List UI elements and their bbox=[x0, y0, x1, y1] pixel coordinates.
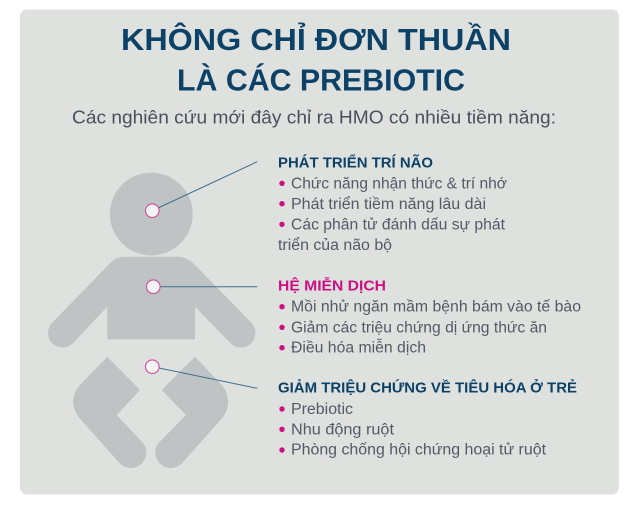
baby right leg bbox=[155, 357, 228, 468]
connector: digestion bbox=[159, 368, 257, 388]
title bbox=[121, 21, 511, 98]
marker: head bbox=[146, 204, 159, 218]
title: LÀ CÁC PREBIOTIC bbox=[177, 62, 465, 98]
heading: brain development: PHÁT TRIỂN TRÍ NÃO bbox=[278, 154, 433, 172]
bullets: brain development bbox=[278, 175, 507, 254]
section: brain development bbox=[278, 154, 507, 254]
bullets: brain development: Các phân tử đánh dấu sự phát bbox=[291, 216, 506, 233]
marker: chest bbox=[146, 280, 160, 294]
bullets: brain development: Phát triển tiềm năng lâu dài bbox=[291, 196, 486, 213]
section: immune system bbox=[278, 277, 581, 357]
bullets: immune system bbox=[279, 299, 581, 357]
bullets: digestive symptoms: Phòng chống hội chứng hoại tử ruột bbox=[291, 442, 547, 458]
bullets: brain development: Chức năng nhận thức & trí nhớ bbox=[291, 175, 507, 192]
bullets: digestive symptoms: Prebiotic bbox=[291, 401, 353, 418]
baby torso and arms bbox=[48, 257, 256, 348]
marker: belly bbox=[146, 360, 159, 374]
bullets: digestive symptoms: Nhu động ruột bbox=[291, 421, 395, 438]
heading: digestive symptoms: GIẢM TRIỆU CHỨNG VỀ TIÊU HÓA Ở TRẺ bbox=[278, 379, 577, 397]
bullets: immune system: Điều hóa miễn dịch bbox=[291, 340, 426, 357]
icon: baby silhouette bbox=[48, 173, 256, 468]
baby head bbox=[110, 173, 193, 255]
subtitle: Các nghiên cứu mới đây chỉ ra HMO có nhiều tiềm năng: bbox=[72, 106, 556, 127]
heading: immune system: HỆ MIỄN DỊCH bbox=[278, 277, 386, 295]
connector: brain bbox=[158, 162, 257, 208]
section: digestive symptoms bbox=[278, 379, 577, 458]
bullets: immune system: Mồi nhử ngăn mầm bệnh bám vào tế bào bbox=[291, 299, 581, 316]
bullets: digestive symptoms bbox=[279, 401, 547, 458]
baby left leg bbox=[73, 357, 146, 468]
connector: immune bbox=[160, 286, 257, 288]
bullets: immune system: Giảm các triệu chứng dị ứng thức ăn bbox=[291, 320, 547, 337]
bullets: brain development: triển của não bộ bbox=[278, 237, 392, 254]
title: KHÔNG CHỈ ĐƠN THUẦN bbox=[121, 21, 511, 57]
